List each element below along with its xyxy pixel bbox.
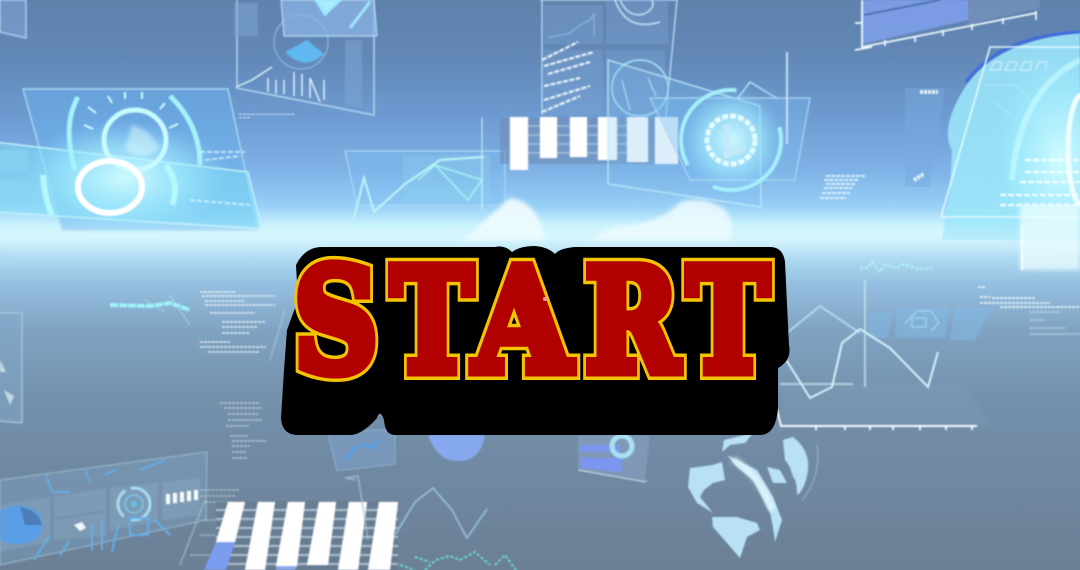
icon: globe xyxy=(688,433,818,558)
title letter fills xyxy=(294,237,769,405)
panel: left edge panel xyxy=(0,313,22,423)
text block: lower code snippet xyxy=(220,403,266,458)
chart: top right axis with blue bars xyxy=(855,0,1040,50)
text block: right code snippet xyxy=(860,262,1080,334)
panel: right head silhouette xyxy=(905,32,1080,280)
bar chart: bottom white bars xyxy=(204,501,398,570)
text block: caption lines xyxy=(239,114,295,118)
title letter outlines: S xyxy=(294,237,378,405)
title letter outlines: T xyxy=(391,237,473,405)
title letter outlines: A xyxy=(472,237,573,405)
panel: left gauge dashboard xyxy=(0,89,262,236)
small sparkle on title xyxy=(543,297,547,301)
black extruded backing xyxy=(281,246,790,435)
title letter fills: R xyxy=(585,237,680,405)
title letter fills: S xyxy=(294,237,378,405)
panel: lower centre mini panels xyxy=(327,430,650,482)
icon: globe highlight xyxy=(733,459,772,510)
chart: bottom line graph xyxy=(345,476,516,570)
panel: top dashboard with radar xyxy=(234,0,377,115)
text block: left code and signal xyxy=(110,292,285,360)
text block: right caption xyxy=(820,176,866,198)
icon: globe tops behind title xyxy=(465,198,732,240)
title letter fills: T xyxy=(687,237,769,405)
title letter fills: T xyxy=(391,237,473,405)
title letter outlines: T xyxy=(687,237,769,405)
panel: bottom left dashboard xyxy=(0,452,240,565)
panel: top left corner fragment xyxy=(0,0,26,38)
title letter outlines xyxy=(294,237,769,405)
title letter outlines: R xyxy=(585,237,680,405)
bar chart: top white bars xyxy=(500,117,680,170)
panel: centre right gauge dashboard xyxy=(608,52,810,208)
horizon glow xyxy=(0,228,1080,248)
panel: centre left chart panel xyxy=(345,118,505,226)
panel: top centre dashboard xyxy=(540,0,677,125)
title: START badge xyxy=(281,237,790,435)
title letter fills: A xyxy=(472,237,573,405)
chart: right line graph xyxy=(770,280,992,430)
